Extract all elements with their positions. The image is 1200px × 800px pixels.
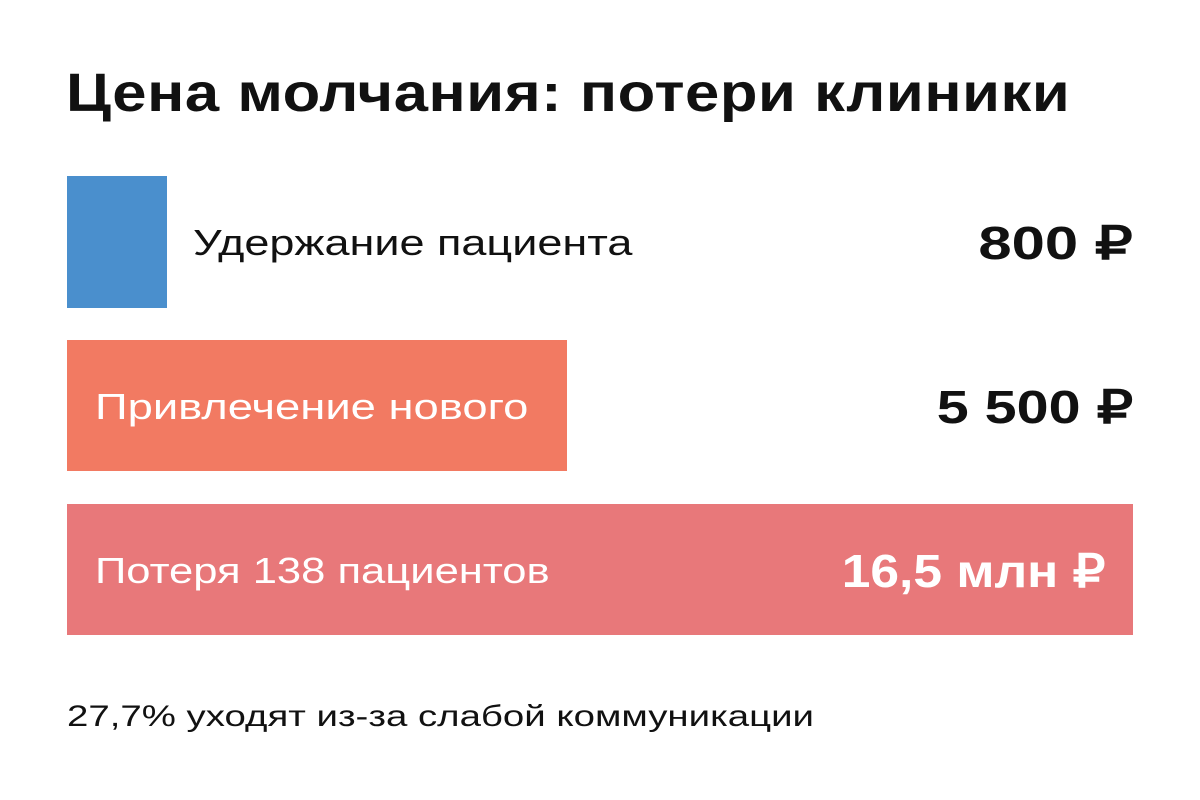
title: Цена молчания: потери клиники xyxy=(66,63,1070,123)
row: retention xyxy=(67,176,1133,308)
value: 16.5 mln: 16,5 млн ₽ xyxy=(841,545,1105,597)
label: loss: Потеря 138 пациентов xyxy=(95,550,550,591)
bar: blue square xyxy=(67,176,167,308)
value: 5500: 5 500 ₽ xyxy=(937,381,1133,433)
row: loss xyxy=(67,504,1133,635)
label: retention: Удержание пациента xyxy=(193,222,632,263)
footnote: 27,7% уходят из-за слабой коммуникации xyxy=(67,700,814,733)
label: acquisition: Привлечение нового xyxy=(95,386,528,427)
value: 800: 800 ₽ xyxy=(979,217,1133,269)
row: acquisition xyxy=(67,340,1133,471)
bar: orange xyxy=(67,340,567,471)
